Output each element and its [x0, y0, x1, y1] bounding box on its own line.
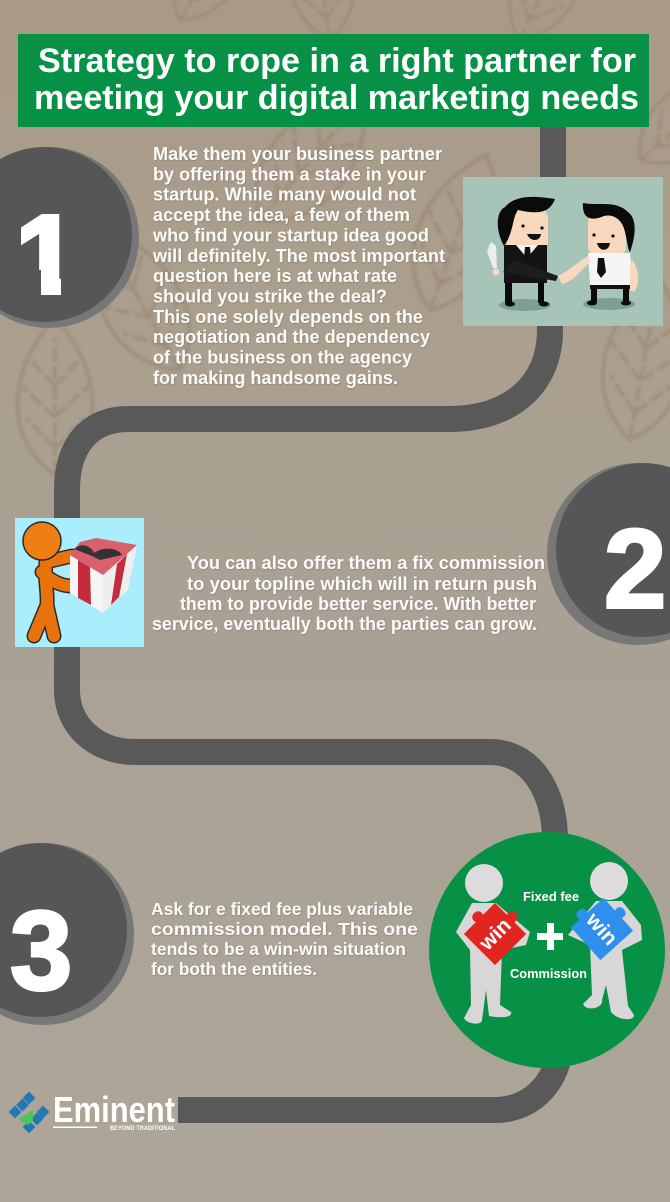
step 3 number badge: 3 [10, 888, 72, 1013]
gift box [70, 538, 137, 613]
step 1 text block: will definitely. The most important [152, 246, 445, 266]
step 1 text block: question here is at what rate [153, 266, 397, 286]
step 1 text block: startup. While many would not [153, 185, 416, 205]
step 2 text block: them to provide better service. With better [180, 594, 536, 614]
commission label: Commission [510, 966, 587, 981]
right man [558, 203, 638, 306]
title text: Strategy to rope in a right partner for [38, 42, 636, 80]
step 1 text block: This one solely depends on the [153, 307, 423, 327]
logo mark [9, 1092, 49, 1133]
step 3 text block: Ask for e fixed fee plus variable [151, 899, 413, 919]
step 1 text block: Make them your business partner [153, 144, 442, 164]
step 3 text block: for both the entities. [151, 959, 317, 979]
step 2 number badge [547, 463, 670, 645]
left man [487, 197, 558, 306]
step 2 text block: to your topline which will in return push [187, 574, 537, 594]
step 1 number badge: 1 [16, 194, 77, 316]
step 1 text block: by offering them a stake in your [153, 164, 426, 184]
step 2 number badge: 2 [604, 506, 666, 632]
winding road path [67, 120, 560, 1110]
logo wordmark: Eminent [53, 1089, 175, 1130]
illustration: two businessmen shaking hands [463, 177, 663, 326]
step 3 text block: tends to be a win-win situation [151, 939, 406, 959]
red puzzle piece with win [459, 892, 531, 965]
step 2 text block: service, eventually both the parties can grow. [152, 614, 537, 634]
step 3 text block [151, 899, 418, 979]
step 2 text block: You can also offer them a fix commission [187, 553, 545, 573]
fixed fee label: Fixed fee [523, 890, 579, 904]
red puzzle piece with win: win [474, 914, 516, 956]
green circle: win-win illustration [429, 832, 665, 1068]
step 1 number badge [0, 147, 139, 328]
logo tagline: BEYOND TRADITIONAL [110, 1126, 175, 1132]
step 3 text block: commission model. This one [151, 919, 418, 939]
step 1 text block: should you strike the deal? [153, 286, 387, 306]
blue puzzle piece with win: win [581, 908, 622, 950]
illustration: orange figure holding gift box [15, 518, 144, 647]
title text [34, 42, 639, 117]
step 1 text block: who find your startup idea good [152, 225, 429, 245]
step 1 text block: of the business on the agency [153, 348, 412, 368]
step 3 number badge [0, 843, 134, 1025]
step 1 text block [152, 144, 445, 388]
orange figure [23, 522, 72, 636]
right figure [568, 862, 642, 1019]
blue puzzle piece with win [566, 887, 639, 960]
title banner [18, 34, 649, 127]
step 1 text block: for making handsome gains. [153, 368, 398, 388]
left figure [456, 864, 530, 1024]
logo: Eminent [9, 1089, 175, 1133]
step 2 text block [152, 553, 545, 634]
plus sign [537, 923, 563, 950]
step 1 text block: accept the idea, a few of them [153, 205, 410, 225]
title text: meeting your digital marketing needs [34, 79, 639, 117]
step 1 text block: negotiation and the dependency [153, 327, 430, 347]
